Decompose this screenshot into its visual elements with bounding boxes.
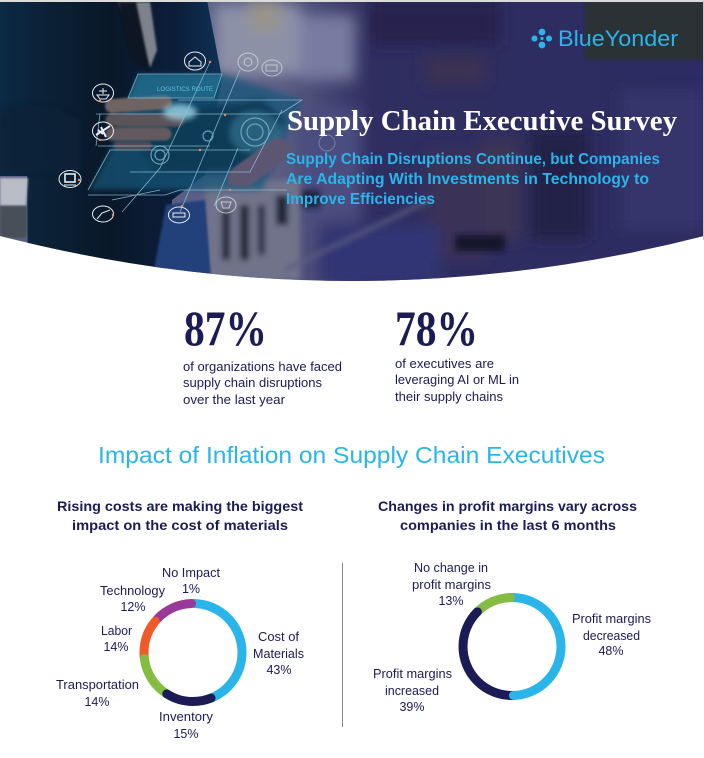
header photo banner	[0, 0, 704, 290]
icon: robot arm	[92, 206, 114, 222]
donut chart: profit margins	[463, 598, 561, 696]
chart heading: profit margins	[378, 498, 637, 533]
warehouse background blur	[215, 0, 704, 285]
section heading: Impact of Inflation on Supply Chain Executives	[98, 442, 605, 468]
hologram gear	[151, 118, 269, 164]
subtitle: Supply Chain Disruptions Continue, but Companies	[286, 151, 660, 168]
donut labels: profit margins: Profit margins	[572, 612, 651, 626]
stat: 87 percent	[183, 300, 342, 407]
icon: cart	[216, 197, 236, 213]
hologram text: LOGISTICS ROUTE	[157, 87, 213, 93]
shirt and tie	[117, 2, 158, 68]
chart heading: rising costs: impact on the cost of materials	[72, 517, 288, 533]
chart heading: profit margins: companies in the last 6 months	[400, 517, 616, 533]
stat text: disruptions	[183, 359, 342, 407]
donut labels: cost impact: No Impact	[162, 566, 221, 580]
icon: plane	[92, 122, 114, 140]
suit jacket	[0, 0, 222, 290]
subtitle	[286, 151, 660, 208]
title: Supply Chain Executive Survey	[287, 106, 677, 137]
holographic tablet glow	[90, 74, 302, 190]
subtitle: Improve Efficiencies	[286, 191, 435, 208]
donut labels: profit margins: decreased	[583, 629, 640, 643]
donut labels: profit margins: profit margins	[412, 578, 491, 592]
donut labels: cost impact: Materials	[253, 647, 304, 661]
stat text: AI or ML: of executives are	[395, 356, 494, 371]
donut labels: cost impact: Cost of	[258, 630, 300, 644]
donut labels: profit margins: 13%	[438, 594, 464, 608]
stat: 78 percent: 78%	[395, 300, 478, 356]
logo backdrop	[585, 2, 704, 60]
chart heading: rising costs: Rising costs are making the biggest	[57, 498, 303, 514]
icon: network	[319, 135, 335, 151]
stat: 78 percent	[395, 300, 519, 404]
donut labels: cost impact: 15%	[173, 727, 199, 741]
donut labels: cost impact: Transportation	[56, 678, 139, 692]
logistics icons	[59, 52, 335, 223]
stat text: AI or ML	[395, 356, 519, 404]
icon: train	[59, 170, 81, 188]
icon: ship	[92, 84, 114, 102]
donut labels: cost impact	[56, 566, 304, 741]
logo wordmark: BlueYonder	[558, 26, 678, 51]
hand holding tablet	[112, 102, 278, 178]
subtitle: Are Adapting With Investments in Technology to	[286, 171, 649, 188]
donut labels: cost impact: Technology	[100, 584, 166, 598]
donut labels: cost impact: Inventory	[159, 710, 214, 724]
chart heading: profit margins: Changes in profit margins vary across	[378, 498, 637, 514]
donut labels: cost impact: 43%	[266, 663, 292, 677]
holographic panels and connector lines	[88, 62, 302, 212]
stat text: disruptions: over the last year	[183, 392, 286, 407]
donut labels: profit margins	[373, 561, 651, 714]
warehouse racks	[205, 180, 505, 280]
hologram node dots	[78, 61, 231, 216]
icon: store	[238, 53, 258, 71]
icon: truck	[168, 207, 190, 223]
icon: logo dots	[532, 29, 552, 48]
donut labels: profit margins: Profit margins	[373, 667, 452, 681]
stat text: AI or ML: leveraging AI or ML in	[395, 372, 519, 387]
donut chart: cost impact	[144, 604, 242, 702]
stat: 87 percent: 87%	[184, 300, 267, 356]
donut labels: cost impact: 14%	[103, 640, 129, 654]
donut labels: cost impact: 14%	[84, 695, 110, 709]
donut labels: profit margins: No change in	[414, 561, 488, 575]
stat text: disruptions: supply chain disruptions	[183, 375, 322, 390]
stat text: disruptions: of organizations have faced	[183, 359, 342, 374]
donut labels: cost impact: 12%	[120, 600, 146, 614]
icon: delivery	[262, 60, 282, 76]
donut labels: cost impact: Labor	[101, 624, 132, 638]
logo: Blue Yonder	[532, 26, 678, 51]
icon: package	[184, 52, 206, 70]
donut labels: profit margins: 39%	[399, 700, 425, 714]
donut labels: profit margins: 48%	[598, 644, 624, 658]
stat text: AI or ML: their supply chains	[395, 389, 503, 404]
donut labels: cost impact: 1%	[182, 582, 200, 596]
chart heading: rising costs	[57, 498, 303, 533]
donut labels: profit margins: increased	[385, 684, 439, 698]
